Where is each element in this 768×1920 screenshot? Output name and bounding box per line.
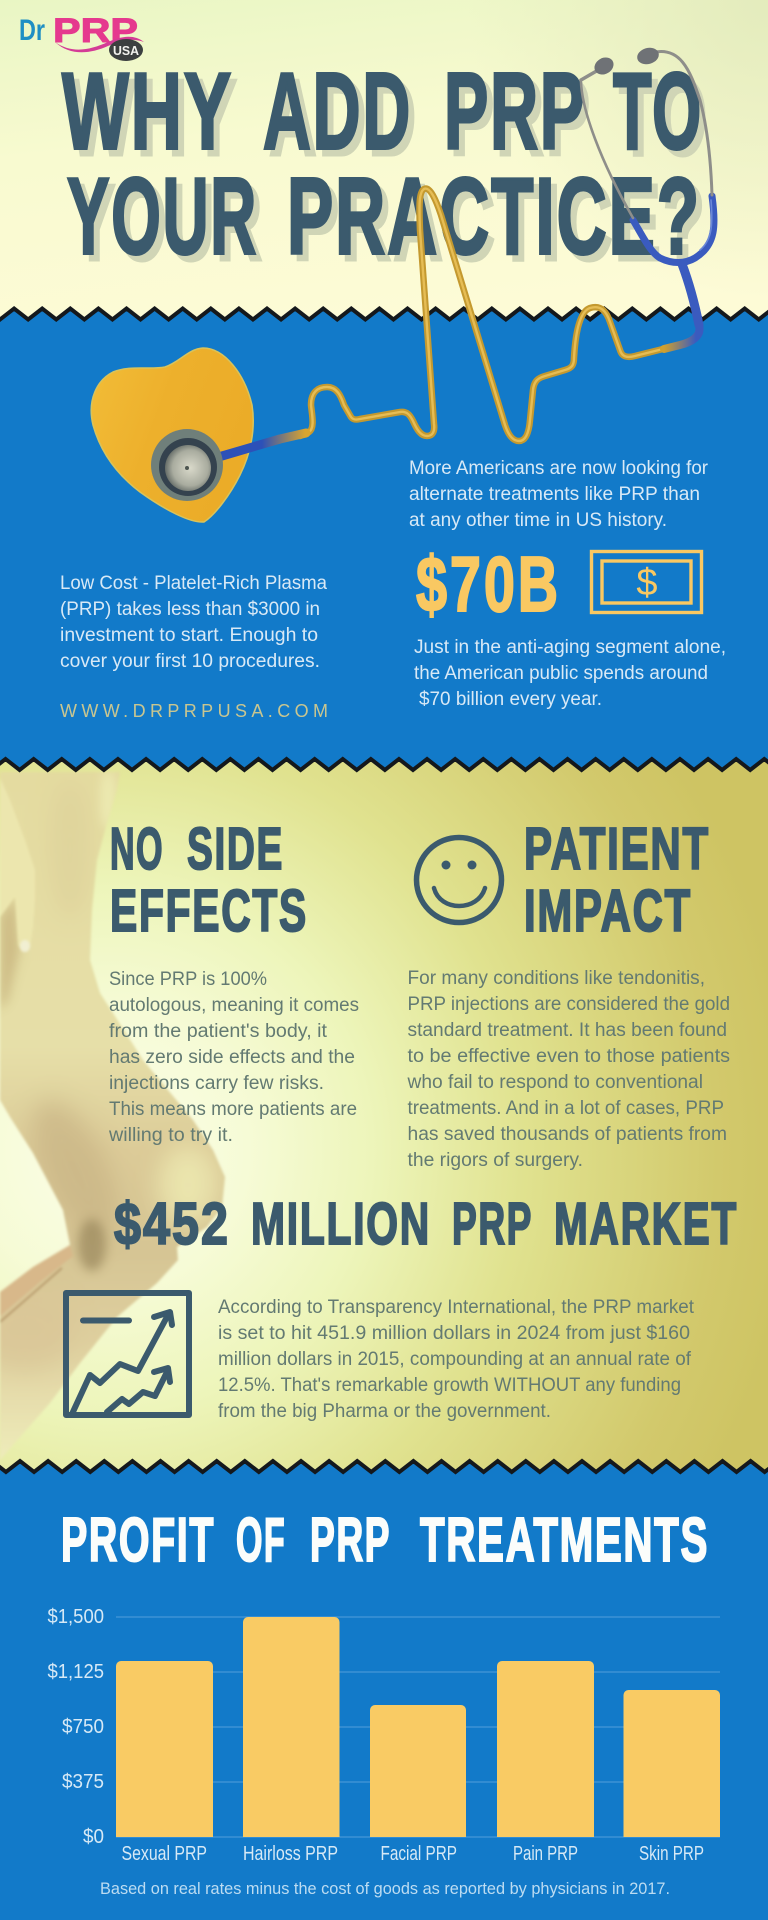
text: no side effects body: willing to try it. [108, 1125, 233, 1146]
text: no side effects body: injections carry few risks. [109, 1073, 324, 1094]
chart gridlines [116, 1617, 720, 1837]
stethoscope blue Y tubing [633, 196, 714, 325]
title text: YOUR [67, 156, 258, 278]
text: low cost [60, 573, 327, 672]
image: leg [0, 770, 225, 1460]
text: no side effects body [108, 969, 359, 1146]
text: patient impact body: treatments. And in a lot of cases, PRP [408, 1098, 724, 1119]
text: more Americans: at any other time in US history. [409, 510, 667, 531]
text: patient impact body: the rigors of surgery. [408, 1150, 583, 1171]
heading: market: PRP [452, 1191, 533, 1257]
text: more Americans [409, 458, 709, 531]
chart bars [116, 1617, 720, 1837]
heading: profit of PRP treatments: PRP [310, 1506, 391, 1575]
heading: patient impact [524, 816, 710, 944]
text: more Americans: alternate treatments like PRP than [409, 484, 700, 505]
heading: no side effects: NO [110, 816, 164, 882]
heading: profit of PRP treatments [61, 1506, 709, 1575]
stethoscope grey ear tubes and earpieces [581, 45, 712, 218]
text: low cost: investment to start. Enough to [60, 625, 318, 646]
text: anti-aging spend: $70 billion every year. [419, 689, 602, 710]
heading: no side effects: SIDE [187, 816, 284, 882]
heading: profit of PRP treatments: OF [236, 1506, 286, 1575]
heading: market: $452 [114, 1191, 230, 1257]
chart x-axis labels: Hairloss PRP [243, 1843, 338, 1865]
panel: first blue band with zigzag edges [0, 308, 768, 770]
title shadow: PRP [450, 57, 592, 179]
text: no side effects body: This means more patients are [109, 1099, 357, 1120]
text: more Americans: More Americans are now looking for [409, 458, 709, 479]
title text [62, 50, 703, 278]
text: no side effects body: Since PRP is 100% [109, 969, 267, 990]
title text: ADD [263, 50, 412, 172]
text: patient impact body [406, 968, 730, 1171]
text: market body [218, 1297, 695, 1422]
stethoscope gold tubing [222, 189, 700, 456]
title text: PRP [444, 50, 586, 172]
chart y-axis labels: $1,500 [48, 1606, 104, 1628]
heading: profit of PRP treatments: PROFIT [61, 1506, 215, 1575]
heading: patient impact: IMPACT [524, 878, 692, 944]
title text: TO [613, 50, 703, 172]
stethoscope chest piece [151, 429, 223, 501]
illustration: heart with stethoscope [91, 45, 714, 522]
logo: Dr PRP USA: USA [113, 43, 140, 58]
text: patient impact body: For many conditions like tendonitis, [408, 968, 705, 989]
icon: smiley face [416, 838, 502, 922]
text: no side effects body: from the patient's body, it [109, 1021, 328, 1042]
text: no side effects body: autologous, meaning it comes [109, 995, 359, 1016]
text: no side effects body: has zero side effects and the [109, 1047, 355, 1068]
chart y-axis labels: $1,125 [48, 1661, 104, 1683]
text: website: WWW.DRPRPUSA.COM [60, 701, 328, 721]
text: patient impact body: has saved thousands of patients from [408, 1124, 727, 1145]
chart x-axis labels: Pain PRP [513, 1843, 578, 1865]
title shadow: WHY [68, 57, 239, 179]
icon: yellow heart [91, 348, 253, 522]
logo: Dr PRP USA [19, 12, 144, 61]
text: anti-aging spend: Just in the anti-aging segment alone, [414, 637, 726, 658]
text: patient impact body: who fail to respond to conventional [406, 1072, 703, 1093]
text: anti-aging spend [414, 637, 726, 710]
heading: no side effects [110, 816, 308, 944]
text: low cost: Low Cost - Platelet-Rich Plasma [60, 573, 327, 594]
logo: Dr PRP USA: PRP [53, 12, 138, 50]
footnote: Based on real rates minus the cost of goods as reported by physicians in 2017. [100, 1879, 670, 1898]
heading: no side effects: EFFECTS [110, 878, 308, 944]
title shadow: YOUR [73, 162, 264, 284]
text: low cost: (PRP) takes less than $3000 in [60, 599, 320, 620]
title shadow [68, 57, 709, 284]
icon: banknote [592, 552, 702, 612]
text: market body: is set to hit 451.9 million dollars in 2024 from just $160 [218, 1323, 690, 1344]
chart x-axis labels: Facial PRP [380, 1843, 457, 1865]
icon: growth chart [66, 1293, 189, 1415]
text: patient impact body: to be effective even to those patients [408, 1046, 730, 1067]
chart x-axis labels: Skin PRP [639, 1843, 704, 1865]
logo: Dr PRP USA: Dr [19, 14, 45, 47]
chart y-axis labels: $375 [62, 1771, 104, 1793]
text: market body: 12.5%. That's remarkable growth WITHOUT any funding [218, 1375, 681, 1396]
heading: market [114, 1191, 738, 1257]
chart x-axis labels [122, 1843, 704, 1865]
text: anti-aging spend: the American public spends around [414, 663, 708, 684]
text: market body: from the big Pharma or the government. [218, 1401, 551, 1422]
chart y-axis labels: $750 [62, 1716, 104, 1738]
chart y-axis labels [48, 1606, 104, 1848]
panel: bottom blue band with zigzag edge [0, 1461, 768, 1920]
text: patient impact body: standard treatment. It has been found [408, 1020, 727, 1041]
title shadow: ADD [269, 57, 418, 179]
stat: $70B: $70B [416, 540, 561, 628]
chart y-axis labels: $0 [83, 1826, 104, 1848]
text: market body: million dollars in 2015, compounding at an annual rate of [218, 1349, 692, 1370]
text: patient impact body: PRP injections are considered the gold [408, 994, 730, 1015]
panel: middle yellow background with leg image [0, 750, 768, 1485]
panel: top background [0, 0, 768, 340]
chart x-axis labels: Sexual PRP [122, 1843, 207, 1865]
text: low cost: cover your first 10 procedures. [60, 651, 320, 672]
heading: market: MILLION [251, 1191, 431, 1257]
title text: WHY [62, 50, 233, 172]
title [62, 50, 709, 284]
text: market body: According to Transparency International, the PRP market [218, 1297, 695, 1318]
bar chart: profit by treatment [48, 1606, 720, 1865]
icon: banknote: $ [636, 562, 658, 604]
